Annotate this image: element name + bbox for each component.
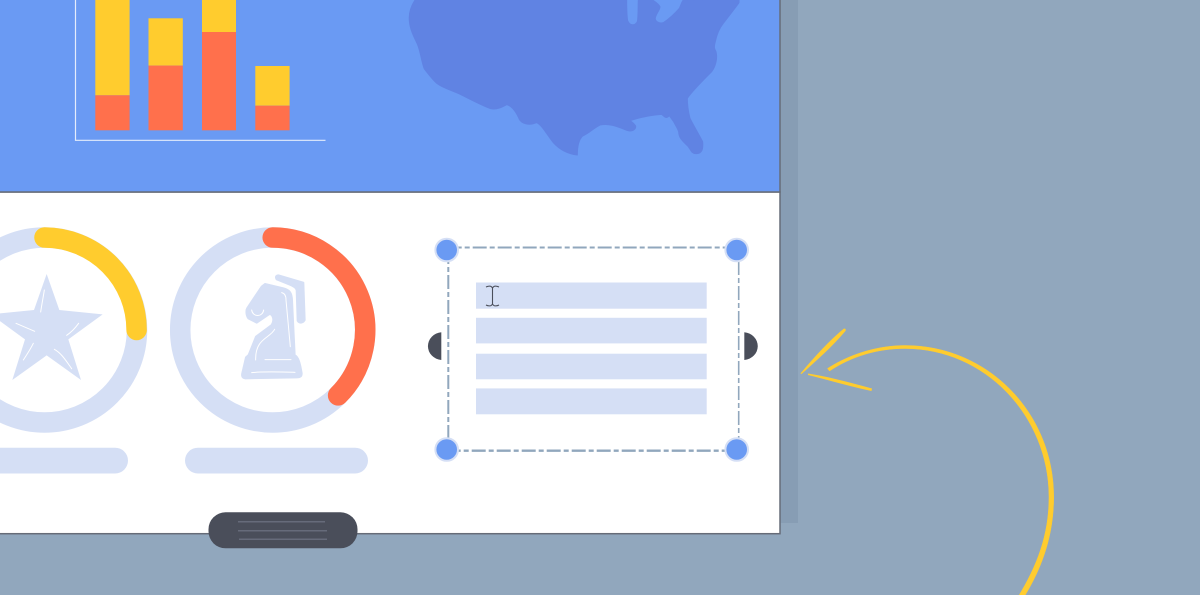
corner handle top left [435, 239, 458, 261]
text line 2 [476, 318, 707, 343]
chart axes [76, 0, 326, 140]
ring progress [273, 238, 365, 395]
arrowhead lower stroke [808, 374, 872, 391]
bar 3 [202, 0, 236, 130]
map of the United States [409, 0, 739, 155]
progress ring: chess knight [180, 238, 365, 422]
text line 4 [476, 388, 707, 414]
panel: blue header [0, 0, 780, 192]
icon: star [0, 274, 103, 380]
label placeholder 1 [0, 448, 128, 474]
bar 2 [148, 18, 183, 130]
corner handle top right [725, 239, 748, 261]
curved arrow [800, 328, 1054, 595]
label placeholder 2 [185, 448, 368, 474]
bar 1 [95, 0, 130, 130]
ring progress [44, 238, 137, 330]
progress ring: star [0, 238, 137, 422]
right side handle [744, 332, 758, 360]
arrow shaft [828, 346, 1054, 595]
arrowhead upper stroke [800, 328, 846, 374]
panel shadow [780, 0, 798, 523]
ring track [0, 238, 137, 422]
corner handle bottom right [725, 438, 748, 461]
panel: white slide [0, 192, 780, 534]
icon: text cursor [486, 286, 499, 306]
dashed selection frame [447, 248, 739, 451]
bar chart [76, 0, 326, 140]
selected text box [428, 239, 758, 461]
left side handle [428, 332, 441, 360]
ring track [180, 238, 365, 422]
corner handle bottom left [435, 438, 458, 461]
text line 3 [476, 354, 707, 379]
icon: chess knight [242, 275, 305, 378]
bottom grip handle [208, 512, 358, 548]
text line 1 [476, 282, 707, 309]
bar 4 [255, 66, 290, 130]
